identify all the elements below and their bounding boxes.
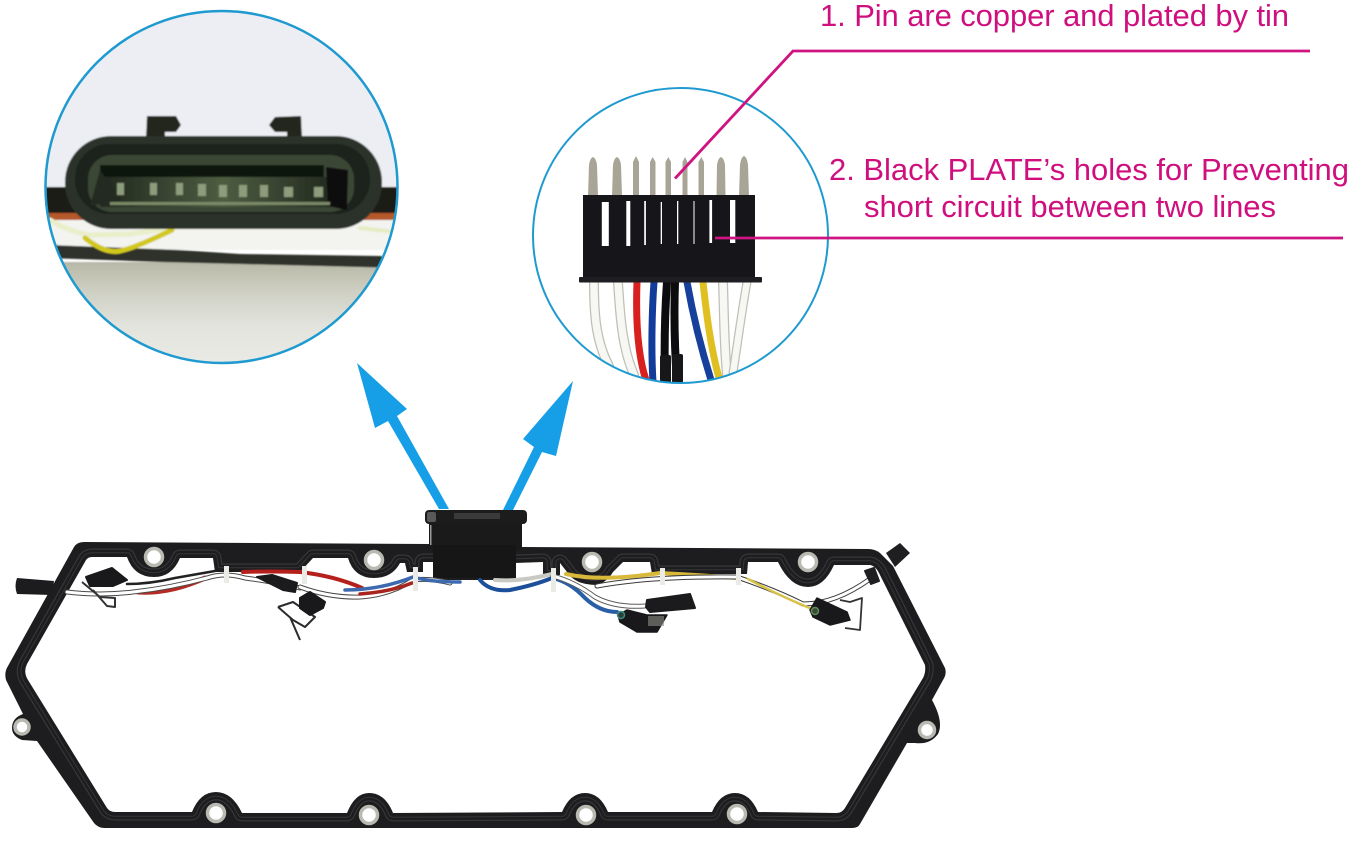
wires <box>67 571 870 612</box>
zip ties <box>224 566 741 592</box>
black plate with slots <box>579 195 762 282</box>
white and yellow wires <box>50 220 395 251</box>
photo circle: connector socket close-up <box>40 5 405 367</box>
wires <box>594 282 747 382</box>
callout line 1 <box>675 51 1310 178</box>
harness connector <box>425 510 527 578</box>
callout text 2 <box>829 152 1349 224</box>
arrow: to pins close-up <box>503 381 573 510</box>
callout text 2: 2. Black PLATE’s holes for Preventing <box>829 152 1349 187</box>
socket pins <box>117 183 323 197</box>
gasket body <box>5 542 946 828</box>
callout line 2 <box>715 237 1343 239</box>
metal pins <box>588 156 749 196</box>
callout text 2: short circuit between two lines <box>864 189 1276 224</box>
arrow: to socket close-up <box>357 363 449 509</box>
injector connectors and clips <box>82 568 879 640</box>
groove lines <box>25 557 925 813</box>
gasket with wiring harness <box>5 510 946 828</box>
oval socket <box>65 116 382 229</box>
left vent stub <box>16 578 54 595</box>
photo circle: pins and black plate close-up <box>530 85 832 387</box>
right vent stub <box>886 543 910 567</box>
bolt holes <box>15 548 934 824</box>
